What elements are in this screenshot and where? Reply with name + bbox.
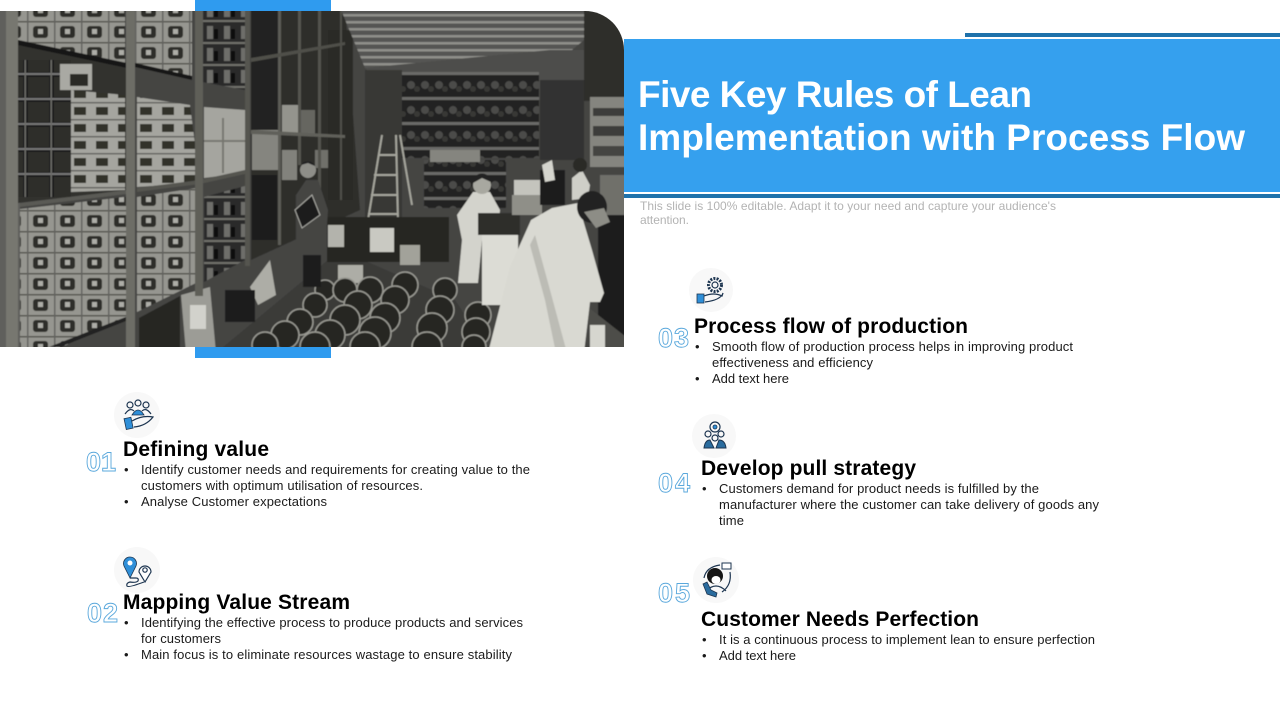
background workers <box>540 170 565 205</box>
bullet text: • <box>124 647 129 662</box>
bullet text: • <box>702 632 707 647</box>
icon: gear over hand <box>689 268 733 312</box>
ceiling and rear wall <box>342 11 585 68</box>
bullet text: manufacturer where the customer can take delivery of goods any <box>719 497 1100 512</box>
bullet text <box>702 632 1095 663</box>
item 02: mapping value stream <box>87 547 524 662</box>
bullet text: for customers <box>141 631 222 646</box>
heading: Develop pull strategy <box>701 457 916 480</box>
bullet text: effectiveness and efficiency <box>712 355 874 370</box>
bullet text: • <box>695 371 700 386</box>
icon: customer support <box>693 557 739 603</box>
standing woman <box>296 180 328 239</box>
item 03: process flow of production <box>658 268 1073 386</box>
bullet text: • <box>124 462 129 477</box>
photo: warehouse with workers <box>0 5 630 362</box>
bullet text: Customers demand for product needs is fulfilled by the <box>719 481 1039 496</box>
bullet text: • <box>124 494 129 509</box>
blue tab: top of photo <box>195 0 331 11</box>
bullet text: Identify customer needs and requirements for creating value to the <box>141 462 530 477</box>
bullet text: • <box>695 339 700 354</box>
bullet text: • <box>124 615 129 630</box>
bullet text <box>124 462 530 509</box>
number 01: 01 <box>86 447 116 477</box>
item 05: customer needs perfection <box>658 557 1095 663</box>
floor: radios <box>250 270 492 347</box>
title text: Five Key Rules of Lean <box>638 74 1032 115</box>
bullet text: • <box>702 481 707 496</box>
bullet text: Add text here <box>719 648 796 663</box>
shelves: wood beams <box>18 40 127 68</box>
bullet text: time <box>719 513 744 528</box>
heading: Process flow of production <box>694 315 968 338</box>
floor <box>224 262 464 347</box>
bullet text <box>124 615 524 662</box>
bullet text <box>695 339 1073 386</box>
right foreground <box>598 215 624 336</box>
bullet text: Analyse Customer expectations <box>141 494 328 509</box>
bullet text: Smooth flow of production process helps in improving product <box>712 339 1073 354</box>
number 03: 03 <box>658 323 689 353</box>
bullet text: Main focus is to eliminate resources wastage to ensure stability <box>141 647 512 662</box>
subtitle <box>640 199 1056 227</box>
number 02: 02 <box>87 598 118 628</box>
number 05: 05 <box>658 578 690 608</box>
bullet text: customers with optimum utilisation of resources. <box>141 478 423 493</box>
accent line: under banner <box>624 194 1280 198</box>
icon: people on a hand <box>114 392 160 438</box>
title text <box>638 74 1245 158</box>
blue tab: bottom of photo <box>195 347 331 358</box>
left shelving boxes <box>0 5 20 353</box>
title banner <box>624 39 1280 192</box>
bullet text: Identifying the effective process to produce products and services <box>141 615 524 630</box>
accent line: top right <box>965 33 1280 37</box>
heading: Customer Needs Perfection <box>701 608 979 631</box>
icon: team with target <box>692 414 736 458</box>
bullet text: Add text here <box>712 371 789 386</box>
bullet text: • <box>702 648 707 663</box>
item 04: develop pull strategy <box>658 414 1100 528</box>
middle dark shelving <box>251 5 360 260</box>
icon: map pins <box>114 547 160 593</box>
bullet text: It is a continuous process to implement lean to ensure perfection <box>719 632 1095 647</box>
white-coated woman <box>457 192 500 283</box>
bullet text <box>702 481 1100 528</box>
subtitle: This slide is 100% editable. Adapt it to your need and capture your audience's <box>640 199 1056 213</box>
heading: Defining value <box>123 438 269 461</box>
subtitle: attention. <box>640 213 689 227</box>
number 04: 04 <box>658 468 690 498</box>
foreground man in white coat <box>488 203 604 353</box>
ladder <box>368 135 412 222</box>
item 01: defining value <box>86 392 530 509</box>
title text: Implementation with Process Flow <box>638 117 1245 158</box>
heading: Mapping Value Stream <box>123 591 350 614</box>
